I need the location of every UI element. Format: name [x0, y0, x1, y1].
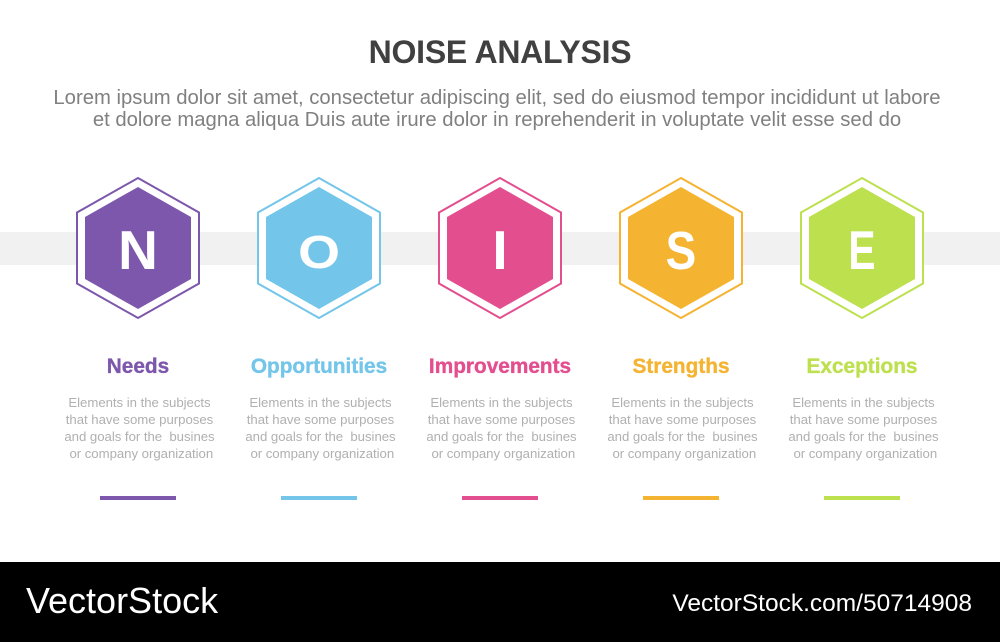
- hexagon: E: E: [848, 220, 876, 282]
- footer logo text: VectorStock: [26, 580, 218, 621]
- subtitle text: Lorem ipsum dolor sit amet, consectetur adipiscing elit, sed do eiusmod tempor incididunt ut labore: [53, 87, 941, 109]
- hexagon: I: [439, 178, 561, 318]
- hexagon: I: I: [492, 219, 508, 281]
- rule: Exceptions: [824, 496, 900, 500]
- subtitle text: et dolore magna aliqua Duis aute irure dolor in reprehenderit in voluptate velit esse sed do: [93, 109, 901, 131]
- hexagon: O: O: [298, 227, 340, 278]
- rule: Opportunities: [281, 496, 357, 500]
- heading: Needs: Needs: [107, 355, 169, 378]
- text block: Opportunities: Elements in the subjects that have some purposes and goals for the busines or company organization: [245, 395, 396, 461]
- footer image id: VectorStock.com/50714908: [672, 590, 972, 617]
- title: NOISE ANALYSIS: [369, 34, 631, 70]
- text block: Strengths: Elements in the subjects that have some purposes and goals for the busines or company organization: [607, 395, 758, 461]
- hexagon: O: [258, 178, 380, 318]
- footer bar: [0, 562, 1000, 642]
- heading: Improvements: Improvements: [429, 355, 571, 378]
- heading: Exceptions: Exceptions: [807, 355, 917, 378]
- text block: Needs: Elements in the subjects that have some purposes and goals for the busines or company organization: [64, 395, 215, 461]
- text block: Improvements: Elements in the subjects that have some purposes and goals for the busines or company organization: [426, 395, 577, 461]
- hexagon: N: [77, 178, 199, 318]
- rule: Strengths: [643, 496, 719, 500]
- hexagon: S: S: [666, 221, 696, 281]
- background band: [0, 232, 1000, 265]
- rule: Needs: [100, 496, 176, 500]
- hexagon: N: N: [118, 219, 158, 281]
- rule: Improvements: [462, 496, 538, 500]
- text block: Exceptions: Elements in the subjects that have some purposes and goals for the busines or company organization: [788, 395, 939, 461]
- hexagon: E: [801, 178, 923, 318]
- heading: Opportunities: Opportunities: [251, 355, 387, 378]
- subtitle text: [53, 87, 941, 131]
- hexagon: S: [620, 178, 742, 318]
- heading: Strengths: Strengths: [632, 355, 730, 378]
